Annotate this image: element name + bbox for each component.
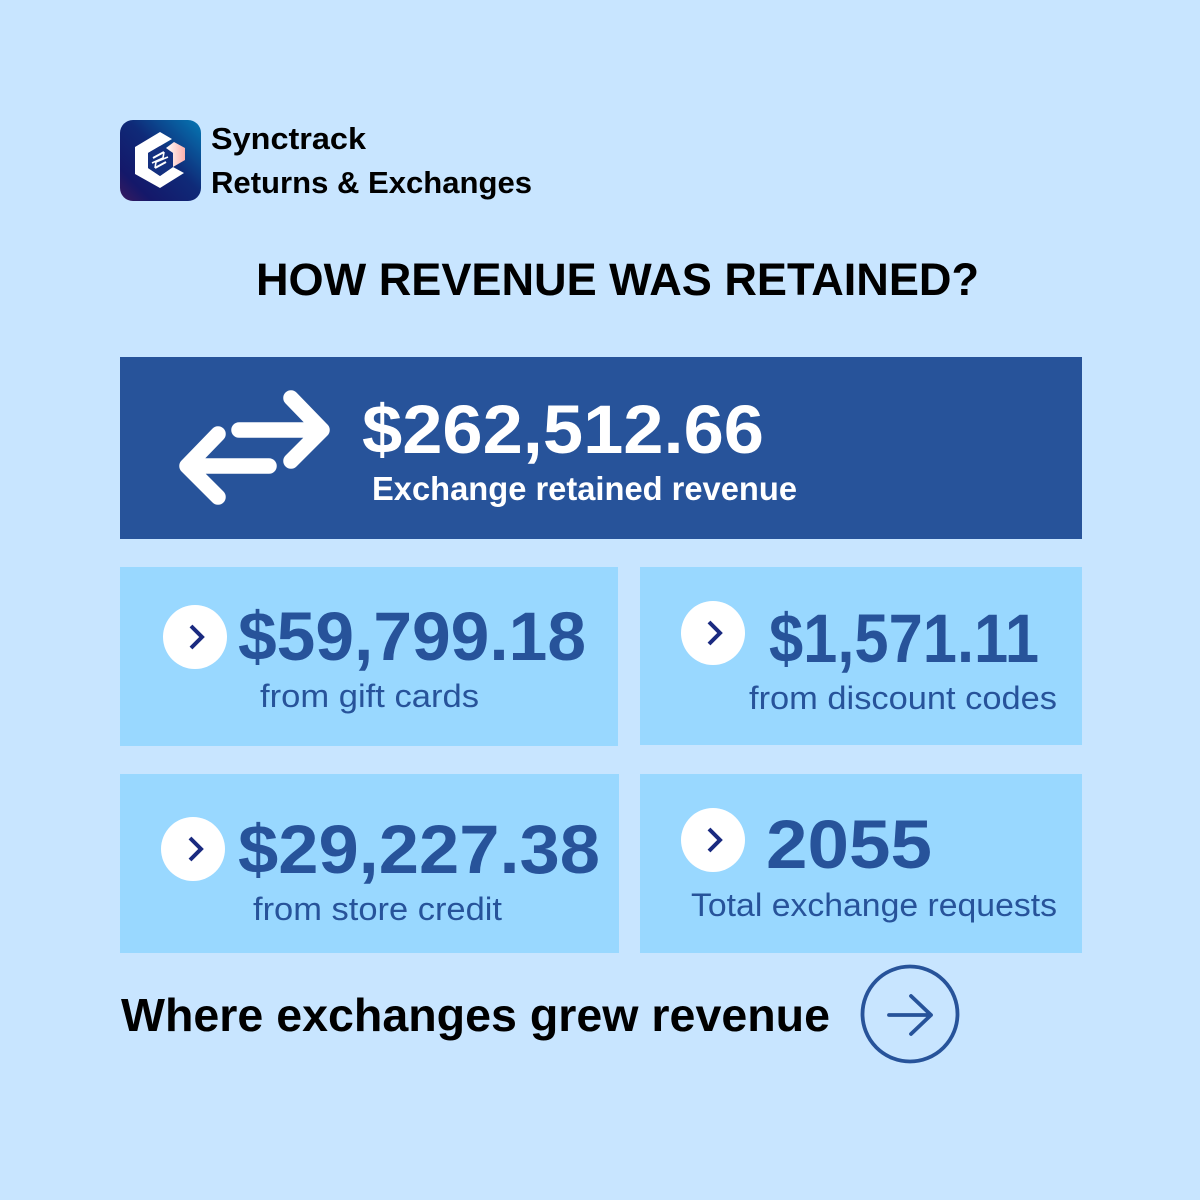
value: 2055 xyxy=(766,806,932,883)
brand name: Returns & Exchanges xyxy=(211,165,532,200)
logo icon xyxy=(120,120,201,201)
panel: store credit xyxy=(120,774,619,953)
caption: Exchange retained revenue xyxy=(372,470,797,507)
footer call to action: Where exchanges grew revenue xyxy=(121,989,830,1041)
caption: from store credit xyxy=(253,891,502,927)
icon: chevron xyxy=(161,817,225,881)
value: $29,227.38 xyxy=(238,811,600,888)
panel: gift cards xyxy=(120,567,618,746)
icon: chevron xyxy=(681,601,745,665)
panel: exchange retained revenue xyxy=(120,357,1082,539)
caption: from discount codes xyxy=(749,680,1057,716)
icon: arrow in circle xyxy=(862,966,958,1062)
caption: from gift cards xyxy=(260,678,479,714)
panel: total exchange requests xyxy=(640,774,1082,953)
icon: chevron xyxy=(681,808,745,872)
panel: discount codes xyxy=(640,567,1082,745)
icon: chevron xyxy=(163,605,227,669)
icon: exchange arrows xyxy=(187,398,322,497)
value: $59,799.18 xyxy=(238,598,586,675)
value: $1,571.11 xyxy=(769,600,1039,677)
value: $262,512.66 xyxy=(362,391,764,468)
brand name xyxy=(211,121,532,200)
caption: Total exchange requests xyxy=(691,887,1057,923)
brand name: Synctrack xyxy=(211,121,367,156)
title: HOW REVENUE WAS RETAINED? xyxy=(256,254,979,305)
